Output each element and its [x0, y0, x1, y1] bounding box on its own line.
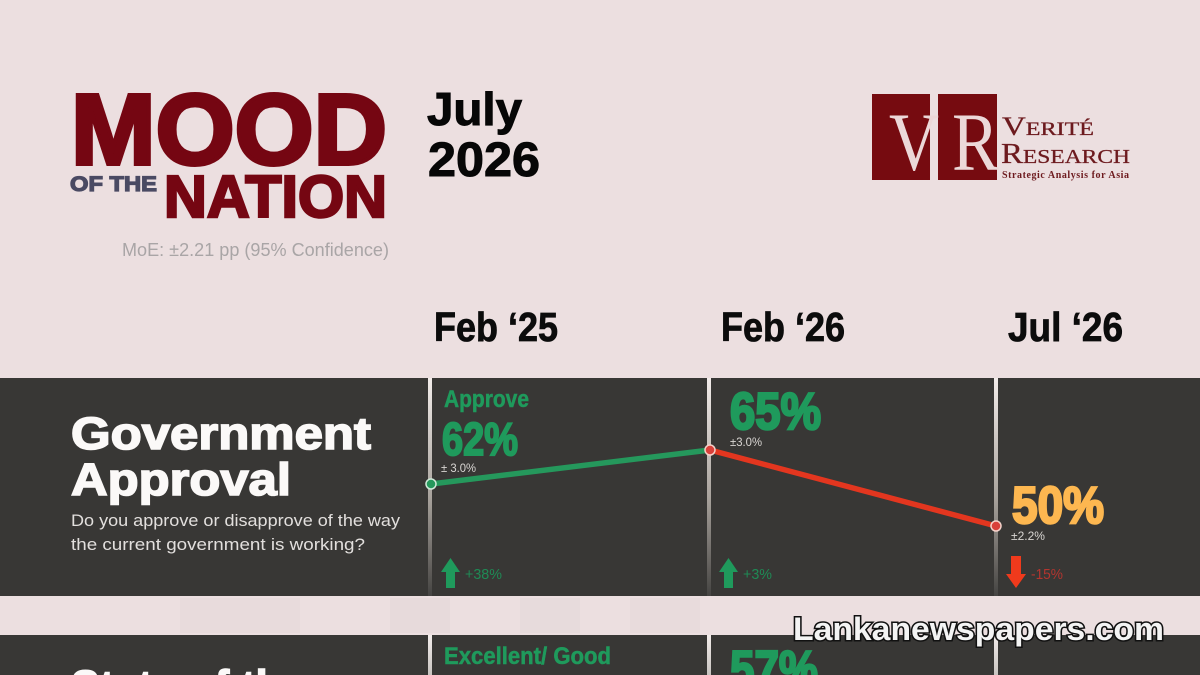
survey question text — [71, 511, 401, 554]
logo: Verité Research: RESEARCH — [1001, 139, 1130, 170]
title: Mood of the Nation: OF THE — [70, 173, 157, 196]
survey question text: the current government is working? — [71, 535, 365, 554]
value: 62% Feb 25: ± 3.0% — [441, 461, 476, 475]
column heading: Jul '26: Jul ‘26 — [1008, 304, 1123, 350]
column heading: Feb '25: Feb ‘25 — [434, 304, 558, 350]
heading: Government Approval: Approval — [71, 454, 291, 505]
logo: Verité Research: R — [952, 96, 1000, 188]
survey question text: Do you approve or disapprove of the way — [71, 511, 401, 530]
panel: state of the economy (cropped) — [0, 635, 1200, 675]
change indicator: +38%: +38% — [465, 566, 502, 583]
heading: Government Approval — [71, 408, 371, 505]
value: 50% Jul 26: ±2.2% — [1011, 529, 1045, 543]
change indicator: +3%: +3% — [743, 566, 772, 583]
heading: Government Approval: Government — [71, 408, 371, 459]
date: July 2026: July — [427, 83, 522, 135]
change indicator: -15%: -15% — [1031, 566, 1063, 583]
value: 65% Feb 26: ±3.0% — [730, 435, 762, 449]
change indicator: +38% — [441, 558, 502, 588]
change indicator: -15% — [1006, 556, 1063, 588]
watermark: Lankanewspapers.com: Lankanewspapers.com — [793, 611, 1164, 647]
value: 62% Feb 25: 62% — [442, 413, 518, 465]
panel: government approval — [0, 378, 1200, 596]
label: Approve: Approve — [444, 386, 529, 413]
title: Mood of the Nation: MOOD — [71, 74, 387, 186]
logo: Verité Research: V — [889, 96, 939, 188]
logo: Verité Research: Strategic Analysis for Asia — [1002, 170, 1129, 181]
line chart: approval trend — [426, 445, 1001, 531]
change indicator: +3% — [719, 558, 772, 588]
logo: Verité Research — [872, 94, 1130, 188]
date: July 2026: 2026 — [428, 134, 540, 187]
title: Mood of the Nation: NATION — [164, 164, 387, 230]
date: July 2026 — [427, 83, 540, 187]
logo: Verité Research: V ERITÉ — [1002, 112, 1094, 141]
margin of error note: MoE: ±2.21 pp (95% Confidence) — [122, 240, 389, 260]
column heading: Feb '26: Feb ‘26 — [721, 304, 845, 350]
value: 50% Jul 26: 50% — [1012, 477, 1104, 535]
label: Excellent/ Good: Excellent/ Good — [444, 643, 611, 670]
value: 65% Feb 26: 65% — [730, 383, 821, 441]
